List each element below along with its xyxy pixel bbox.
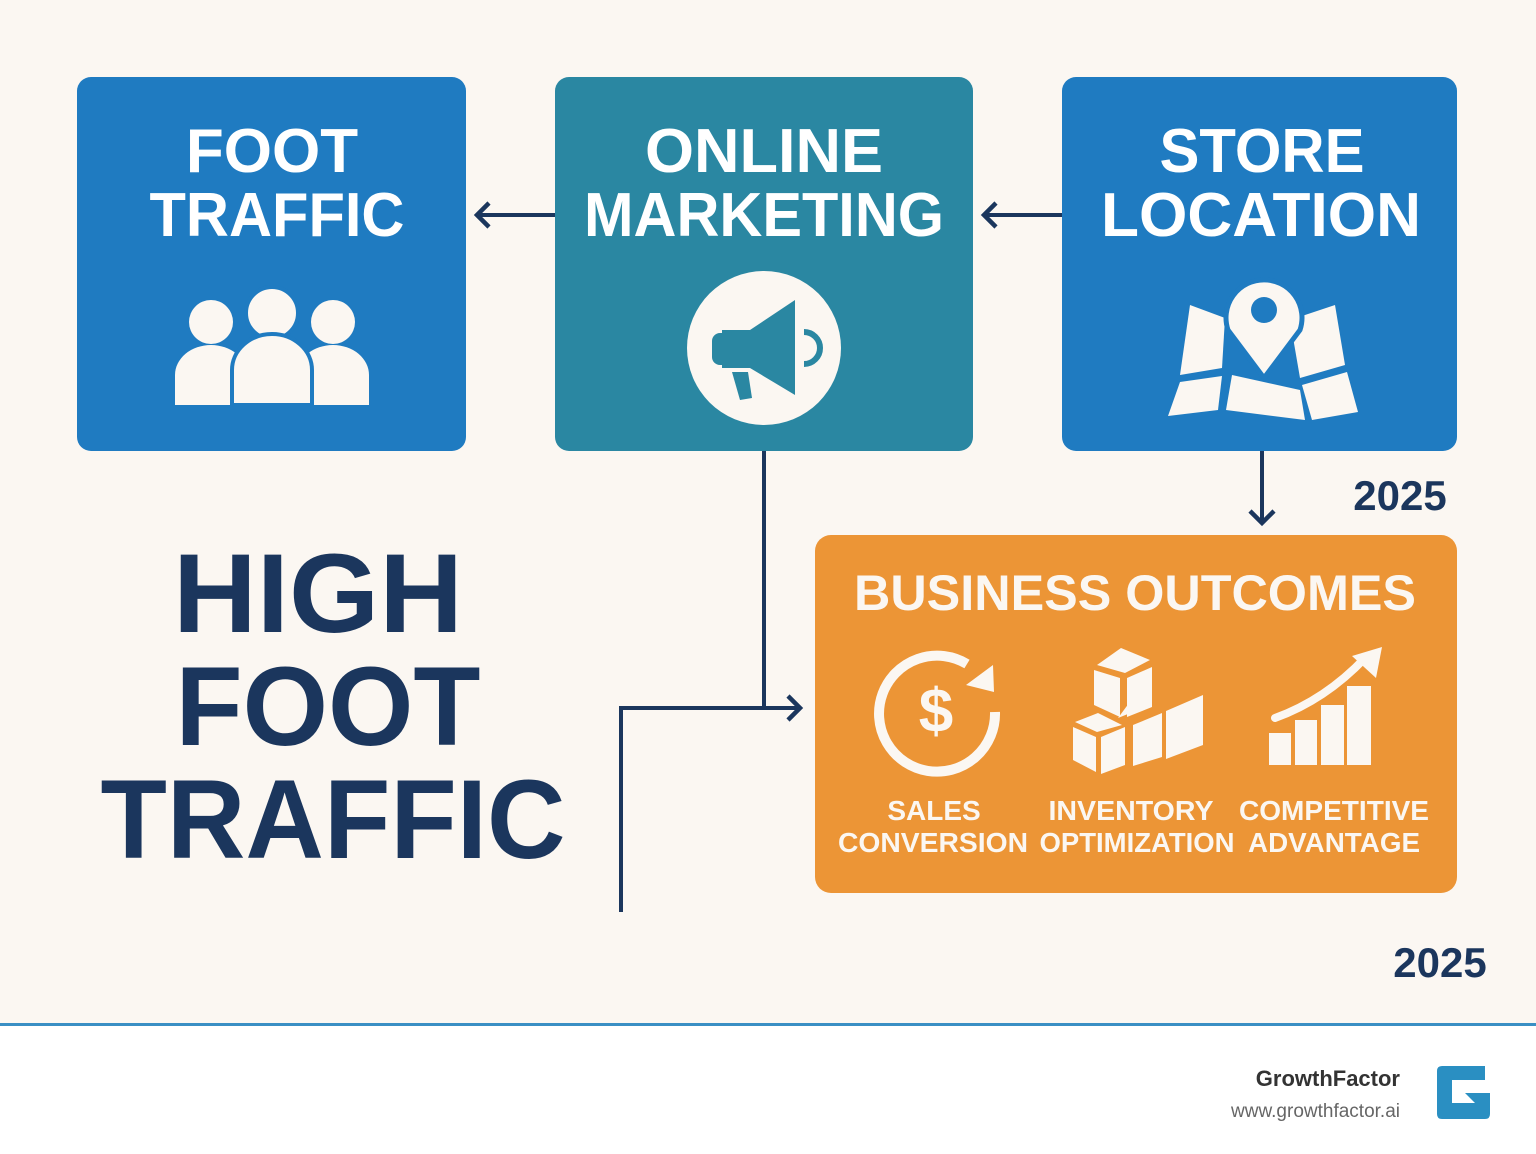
footer brand: GrowthFactor	[1256, 1066, 1400, 1091]
heading: high foot traffic: FOOT	[176, 644, 480, 769]
heading: foot traffic: FOOT	[186, 117, 358, 186]
panel: store location: LOCATION	[1101, 181, 1421, 250]
labels: COMPETITIVE	[1239, 795, 1429, 826]
panel: online marketing	[555, 77, 973, 451]
icon: people	[175, 287, 369, 405]
heading: business outcomes: BUSINESS OUTCOMES	[854, 565, 1416, 621]
labels: OPTIMIZATION	[1040, 827, 1234, 858]
icon: megaphone	[687, 271, 841, 425]
heading: online marketing: ONLINE	[645, 117, 883, 186]
text: 2025 bottom: 2025	[1393, 939, 1487, 986]
icon: sales conversion	[879, 656, 995, 772]
arrow: store to outcomes	[1260, 451, 1264, 522]
text: 2025 top: 2025	[1353, 472, 1447, 519]
footer brand	[1230, 1066, 1490, 1122]
icon: logo G	[1437, 1066, 1490, 1119]
panel: business outcomes	[815, 535, 1457, 893]
labels: CONVERSION	[838, 827, 1028, 858]
heading: high foot traffic: HIGH	[173, 531, 463, 656]
icon: inventory boxes	[1073, 648, 1203, 774]
arrow: online to foot traffic	[478, 213, 555, 217]
icon: map with pin	[1168, 280, 1358, 420]
labels: ADVANTAGE	[1248, 827, 1420, 858]
labels: SALES	[887, 795, 981, 826]
panel: foot traffic: TRAFFIC	[150, 181, 404, 250]
icon: competitive advantage chart	[1269, 647, 1382, 765]
heading: high foot traffic: TRAFFIC	[100, 757, 566, 882]
labels: INVENTORY	[1048, 795, 1214, 826]
panel: online marketing: MARKETING	[584, 181, 944, 250]
heading: store location: STORE	[1160, 117, 1364, 186]
icon: sales conversion: $	[919, 677, 953, 746]
panel: store location	[1062, 77, 1457, 451]
arrow: online to outcomes	[621, 451, 799, 912]
heading: high foot traffic	[100, 531, 566, 882]
panel: foot traffic	[77, 77, 466, 451]
labels	[838, 795, 1429, 858]
arrow: store to online	[985, 213, 1062, 217]
footer brand: www.growthfactor.ai	[1230, 1101, 1400, 1122]
